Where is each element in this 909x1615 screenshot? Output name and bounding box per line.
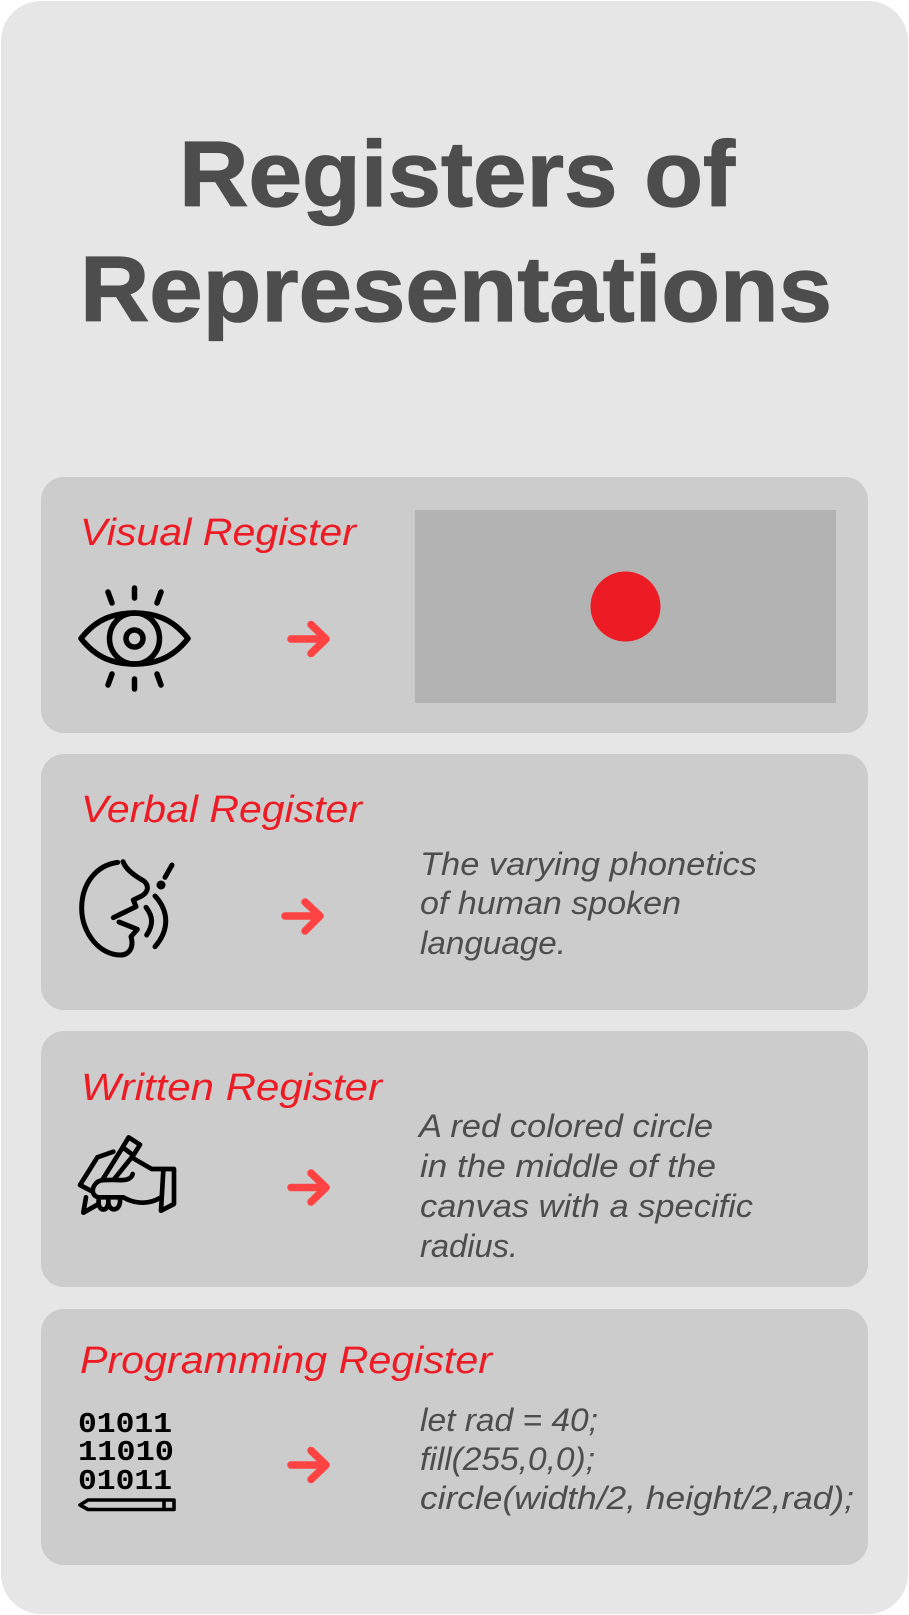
code text: let rad = 40;	[420, 1402, 598, 1438]
heading: programming register: Programming Register	[80, 1340, 493, 1382]
description text: language.	[420, 925, 566, 961]
code text	[420, 1402, 854, 1516]
panel: visual register	[41, 477, 868, 733]
icon: binary and pencil	[78, 1408, 174, 1510]
arrow	[291, 624, 326, 654]
description text	[417, 1108, 753, 1264]
description text	[420, 846, 757, 961]
heading: visual register: Visual Register	[80, 512, 357, 554]
icon: binary and pencil: 01011	[78, 1408, 172, 1441]
icon: binary and pencil: 11010	[78, 1436, 174, 1469]
title: Registers of	[179, 122, 736, 226]
title	[80, 122, 832, 341]
description text: The varying phonetics	[420, 846, 757, 882]
panel: verbal register	[41, 754, 868, 1010]
arrow	[291, 1450, 326, 1480]
icon: binary and pencil: 01011	[78, 1465, 172, 1498]
description text: A red colored circle	[417, 1108, 713, 1144]
arrow	[285, 902, 320, 931]
description text: canvas with a specific	[420, 1188, 753, 1224]
description text: of human spoken	[420, 885, 681, 921]
heading: written register: Written Register	[81, 1067, 383, 1109]
code text: fill(255,0,0);	[420, 1441, 595, 1477]
code text: circle(width/2, height/2,rad);	[420, 1480, 854, 1516]
panel: written register	[41, 1031, 868, 1287]
description text: in the middle of the	[420, 1148, 716, 1184]
arrow	[291, 1173, 326, 1202]
icon: hand writing	[80, 1137, 174, 1213]
title: Representations	[80, 237, 832, 341]
heading: verbal register: Verbal Register	[81, 789, 363, 831]
canvas with red circle	[415, 510, 836, 703]
panel: programming register	[41, 1309, 868, 1565]
icon: eye	[81, 588, 188, 689]
description text: radius.	[420, 1228, 518, 1264]
icon: speaking face	[82, 862, 172, 955]
